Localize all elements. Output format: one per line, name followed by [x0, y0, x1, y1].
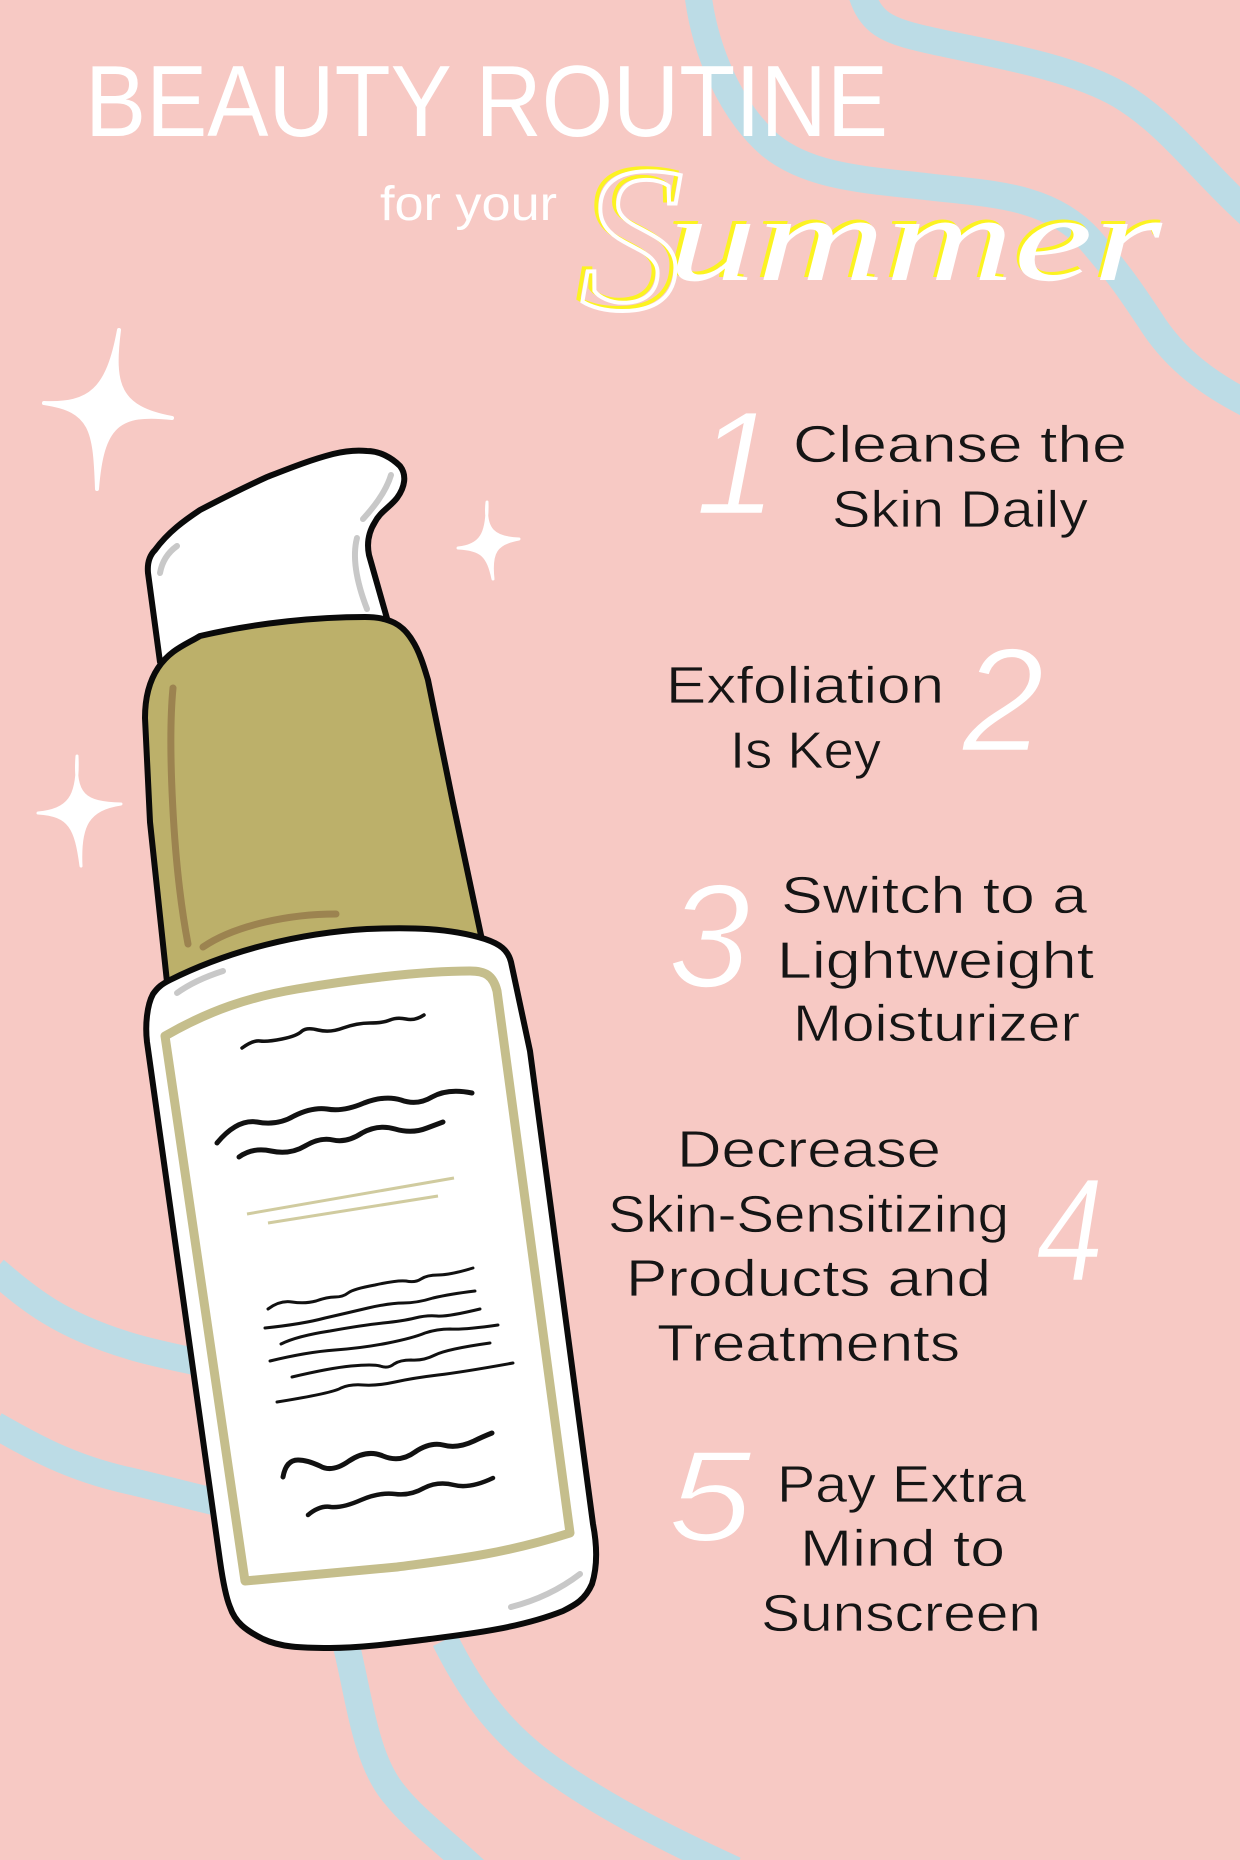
- step 1: [695, 381, 1127, 546]
- step 3 text line 3: Moisturizer: [793, 995, 1080, 1053]
- collar shading: [171, 688, 336, 947]
- bottle collar: [145, 617, 482, 982]
- step 5: [668, 1423, 1041, 1643]
- bottle pump: [148, 451, 404, 662]
- step 5 text line 3: Sunscreen: [761, 1585, 1041, 1643]
- step 3: [668, 854, 1095, 1053]
- step 5 text line 2: Mind to: [800, 1520, 1005, 1578]
- label scribble lines: [217, 1015, 513, 1515]
- number 3: 3: [668, 854, 750, 1019]
- yellow shadow of S: S: [576, 121, 680, 351]
- white lowercase letters: ummer: [668, 172, 1163, 307]
- step 3 text: Switch to a: [781, 867, 1087, 925]
- step 4 text line 2: Skin-Sensitizing: [608, 1186, 1009, 1244]
- pump highlights: [160, 475, 391, 609]
- title: BEAUTY ROUTINE: [85, 46, 888, 158]
- icon: small sparkle right: [458, 502, 519, 579]
- step 4: [608, 1121, 1104, 1373]
- step 2 text: Exfoliation: [666, 657, 944, 715]
- yellow shadow of lowercase letters: ummer: [664, 169, 1161, 304]
- icon: small sparkle left: [38, 756, 121, 866]
- step 2 text line 2: Is Key: [730, 722, 881, 780]
- label border: [165, 971, 570, 1581]
- number 4: 4: [1036, 1148, 1104, 1313]
- icon: large sparkle: [44, 330, 172, 489]
- step 3 text line 2: Lightweight: [777, 932, 1095, 990]
- step 4 text: Decrease: [677, 1121, 941, 1179]
- step 4 text line 3: Products and: [626, 1250, 991, 1308]
- step 5 text: Pay Extra: [777, 1456, 1026, 1514]
- number 2: 2: [961, 618, 1044, 783]
- script word: Summer: [576, 121, 1163, 354]
- subtitle: for your: for your: [380, 178, 557, 231]
- step 1 text line 2: Skin Daily: [832, 481, 1088, 539]
- step 1 text: Cleanse the: [793, 416, 1127, 474]
- body highlights: [177, 971, 580, 1607]
- number 5: 5: [668, 1423, 753, 1569]
- number 1: 1: [695, 381, 777, 546]
- bottle body: [146, 928, 596, 1648]
- label olive rules: [247, 1178, 454, 1223]
- step 4 text line 4: Treatments: [657, 1315, 960, 1373]
- white S: S: [580, 124, 684, 354]
- step 2: [666, 618, 1044, 783]
- icon: product bottle: [145, 451, 596, 1648]
